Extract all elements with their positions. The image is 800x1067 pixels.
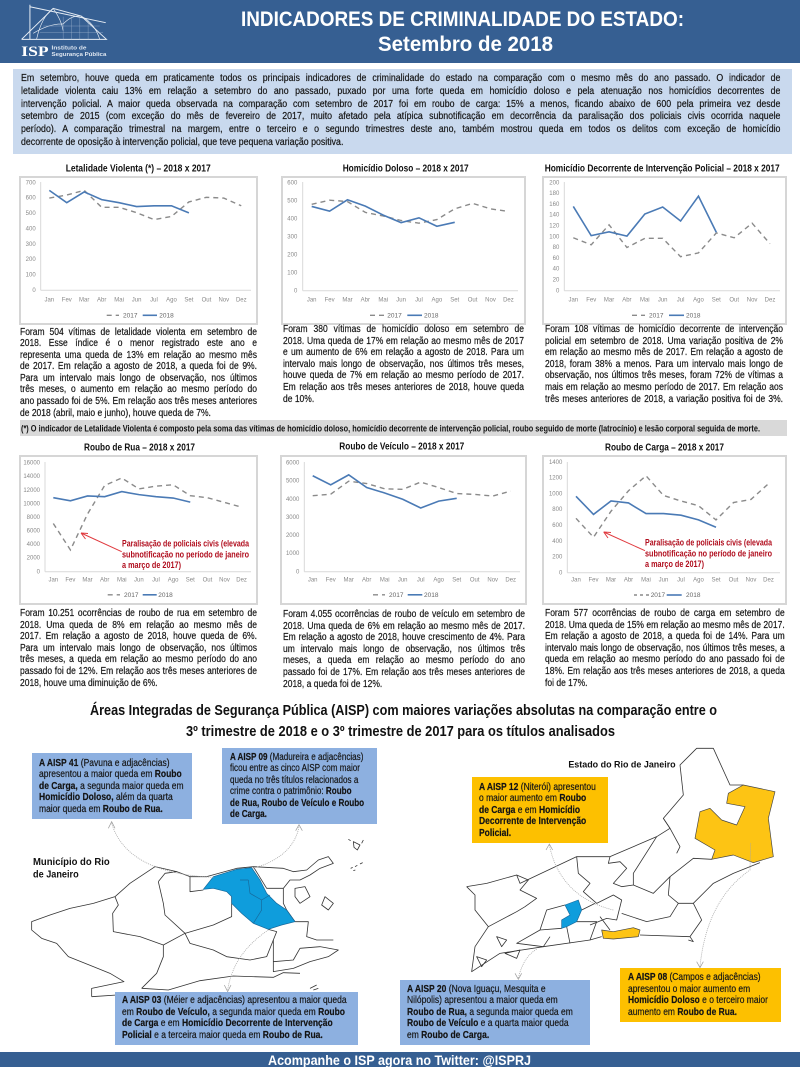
chart: Homicídio Decorrente de Intervenção Policial: 120	[549, 223, 560, 229]
chart: Homicídio Doloso: 400	[287, 216, 298, 222]
text: Letalidade Violenta caption: de 2018 (abril, maio e junho), houve queda de 7%.	[20, 408, 211, 419]
chart: Roubo de Veículo: Fev	[326, 578, 336, 584]
chart: Roubo de Rua: 6000	[27, 528, 41, 534]
callout: AISP 41: maior queda em Roubo de Rua.	[39, 804, 163, 815]
chart: Roubo de Rua: Abr	[100, 578, 109, 584]
chart: Roubo de Rua: Set	[186, 578, 195, 584]
section heading: AISP: 3º trimestre de 2018 e o 3º trimestre de 2017 para os títulos analisados	[186, 724, 615, 740]
chart: Homicídio Decorrente de Intervenção Policial: 180	[549, 191, 560, 197]
chart: Letalidade Violenta: Mar	[79, 298, 89, 304]
chart: Roubo de Veículo: Jul	[417, 578, 425, 584]
chart: Roubo de Carga: 1200	[549, 476, 563, 482]
chart: Letalidade Violenta: 200	[26, 257, 36, 263]
chart: Roubo de Rua: Mai	[117, 578, 127, 584]
callout: AISP 20: Roubo de Rua, a segunda maior queda em	[407, 1007, 573, 1018]
label: Município do Rio de Janeiro: de Janeiro	[33, 870, 79, 881]
chart: Homicídio Doloso: 2018	[424, 312, 439, 320]
chart: Homicídio Decorrente de Intervenção Policial: 200	[549, 180, 560, 186]
label: Estado do Rio de Janeiro: Estado do Rio de Janeiro	[568, 759, 676, 769]
chart: Roubo de Veículo: Dez	[505, 578, 516, 584]
callout: AISP 09: de Carga.	[230, 809, 267, 820]
callout: AISP 08	[620, 968, 781, 1022]
callout: AISP 20: A AISP 20 (Nova Iguaçu, Mesquita e	[407, 984, 546, 994]
chart: Letalidade Violenta: Jul	[150, 298, 158, 304]
chart: Roubo de Carga: 0	[559, 570, 563, 576]
text: Intervenção Policial caption: observação, nos últimos três meses, foram 72% de vítimas a	[545, 370, 783, 381]
chart: Roubo de Rua: Mar	[82, 578, 93, 584]
callout: AISP 09: A AISP 09 (Madureira e adjacências)	[230, 752, 363, 762]
chart: Roubo de Carga: Nov	[746, 578, 756, 584]
chart: Roubo de Veículo: Abr	[362, 578, 371, 584]
panel: intro summary: período). A comparação trimestral na margem, entre o terceiro e o segundo trimestres deste ano, também mostrou queda em todos os delitos com exceção de homicídio	[21, 124, 780, 135]
text: Roubo de Veículo caption: 2018. Uma queda de 6% em relação ao mesmo mês de 2017.	[283, 621, 525, 632]
chart: Homicídio Decorrente de Intervenção Policial: 0	[556, 288, 560, 294]
chart titles: first row	[66, 163, 780, 175]
chart: Roubo de Carga: Out	[729, 578, 739, 584]
chart: Letalidade Violenta: Jun	[132, 298, 141, 304]
text: Roubo de Veículo caption: um intervalo mais longo de observação, nos últimos três	[283, 644, 525, 655]
chart: Roubo de Veículo: 2017	[389, 592, 404, 599]
chart: Roubo de Rua: Jan	[48, 578, 58, 584]
chart: Roubo de Veículo: Mar	[344, 578, 354, 584]
panel: intro summary: intervenção policial. A maior queda observada na comparação com setembro de 2017 foi em roubo de carga: 15% a menos, ficando abaixo de 600 pela primeira vez desde	[21, 99, 780, 110]
text: Roubo de Carga caption: 18%. Em relação aos três meses anteriores de 2018, a queda	[545, 666, 785, 677]
chart: Homicídio Doloso: Jul	[415, 298, 423, 304]
callout: paralisação	[81, 533, 250, 570]
callout: AISP 08: aumento em Roubo de Rua.	[628, 1007, 737, 1018]
chart: Homicídio Doloso: Jan	[307, 298, 317, 304]
chart: Letalidade Violenta: 600	[26, 196, 36, 202]
text: Roubo de Veículo caption: Foram 4.055 ocorrências de roubo de veículo em setembro de	[283, 609, 525, 620]
text: Homicídio Doloso caption: Foram 380 vítimas de homicídio doloso em setembro de	[283, 324, 524, 335]
chart: Roubo de Veículo	[281, 456, 526, 604]
chart: Roubo de Rua: 2017	[124, 592, 139, 599]
chart: Homicídio Decorrente de Intervenção Policial: 80	[553, 245, 560, 251]
text: Roubo de Carga caption: 2018. Uma queda de 15% em relação ao mesmo mês de 2017.	[545, 620, 785, 631]
chart: Homicídio Doloso: 500	[287, 198, 298, 204]
callout: AISP 08: apresentou o maior aumento em	[628, 984, 750, 995]
chart: Roubo de Rua: Jul	[152, 578, 160, 584]
highlighted AISP 20	[562, 900, 582, 928]
chart: Roubo de Carga: 2018	[686, 592, 701, 599]
chart: Roubo de Veículo: Ago	[433, 578, 445, 584]
chart: Letalidade Violenta: 2018	[159, 312, 174, 320]
chart: Roubo de Veículo: 4000	[286, 497, 300, 503]
chart: Homicídio Doloso: Out	[468, 298, 478, 304]
chart: Roubo de Rua: 10000	[23, 501, 41, 507]
text: Roubo de Carga caption: intervalo mais longo de observação, nos últimos três meses, a	[545, 643, 785, 654]
chart: Roubo de Rua: Nov	[219, 578, 230, 584]
text: Letalidade Violenta caption: 2018. Esse índice é o menor registrado este ano e	[20, 338, 257, 349]
chart titles: second row: Roubo de Rua – 2018 x 2017	[84, 442, 195, 454]
chart: Roubo de Rua: 12000	[23, 488, 41, 494]
chart: Letalidade Violenta: Out	[202, 298, 212, 304]
callout: AISP 41: A AISP 41 (Pavuna e adjacências)	[39, 758, 170, 768]
chart: Roubo de Rua: Fev	[65, 578, 75, 584]
callout: AISP 03: de Carga e em Homicídio Decorrente de Intervenção	[122, 1018, 333, 1029]
text: Roubo de Rua caption: três meses, a queda em relação ao mesmo período do ano	[20, 654, 257, 665]
callout: paralisação: a março de 2017)	[645, 559, 704, 569]
chart: Roubo de Carga: 400	[552, 539, 563, 545]
chart: Roubo de Rua: Ago	[168, 578, 179, 584]
chart: Letalidade Violenta: 100	[26, 272, 36, 278]
chart: Letalidade Violenta	[20, 177, 257, 324]
chart: Roubo de Carga: Abr	[624, 578, 633, 584]
callout: AISP 03: A AISP 03 (Méier e adjacências) apresentou a maior queda	[122, 995, 347, 1006]
chart: Homicídio Decorrente de Intervenção Policial: Nov	[747, 298, 757, 304]
chart: Letalidade Violenta: Dez	[236, 298, 247, 304]
chart: Homicídio Decorrente de Intervenção Policial: 20	[553, 277, 560, 283]
chart: Roubo de Carga: 600	[552, 523, 563, 529]
label: Município do Rio de Janeiro	[33, 857, 110, 881]
chart: Homicídio Doloso: Dez	[503, 298, 514, 304]
chart: Homicídio Decorrente de Intervenção Policial: Fev	[586, 298, 596, 304]
chart: Letalidade Violenta: 2017	[123, 312, 138, 320]
chart: Homicídio Doloso: 300	[287, 234, 298, 240]
map: Município do Rio de Janeiro	[31, 821, 364, 998]
chart: Homicídio Decorrente de Intervenção Policial: 160	[549, 202, 560, 208]
text: Roubo de Veículo caption: meses, a queda em relação ao mesmo período do ano	[283, 655, 525, 666]
title: Setembro de 2018	[378, 33, 553, 56]
callout: paralisação	[604, 532, 773, 569]
text: Letalidade Violenta caption	[20, 326, 257, 419]
map outline and regional boundaries	[467, 748, 760, 972]
map: Estado do Rio de Janeiro	[466, 748, 776, 980]
chart: Roubo de Carga: Dez	[763, 578, 774, 584]
text: Homicídio Doloso caption: de 10%.	[283, 394, 314, 405]
text: Roubo de Rua caption: 2017. Em relação a agosto de 2018, houve queda de 6%.	[20, 631, 257, 642]
callout: AISP 03: Policial e a terceira maior queda em Roubo de Rua.	[122, 1030, 323, 1041]
callout: AISP 41: de Carga, a segunda maior queda em	[39, 781, 184, 792]
text: Intervenção Policial caption: 2018, foram 38% a menos. Para um intervalo mais longo de	[545, 359, 783, 370]
chart: Roubo de Carga: Jan	[571, 578, 581, 584]
chart: Letalidade Violenta: 500	[26, 211, 36, 217]
text: Roubo de Carga caption	[545, 608, 785, 689]
chart: Homicídio Decorrente de Intervenção Policial	[543, 177, 786, 324]
chart: Homicídio Doloso: Abr	[361, 298, 370, 304]
chart: Roubo de Veículo: Mai	[380, 578, 390, 584]
section heading: AISP	[90, 702, 717, 740]
callout: AISP 41: Homicídio Doloso, além da quarta	[39, 792, 173, 803]
chart: Roubo de Carga: Set	[711, 578, 721, 584]
panel: intro summary: decorrente de oposição à intervenção policial, que teve pequena variação positiva.	[21, 137, 343, 148]
header banner	[0, 0, 800, 63]
text: Roubo de Rua caption: 2018. Uma queda de 8% em relação ao mesmo mês de	[20, 620, 257, 631]
chart: Homicídio Decorrente de Intervenção Policial: 100	[549, 234, 560, 240]
chart: Roubo de Rua	[20, 456, 257, 604]
chart: Letalidade Violenta: Set	[184, 298, 194, 304]
icon: ISP logo	[21, 4, 108, 60]
text: Homicídio Doloso caption: intervalo mais longo de observação, nos últimos três meses,	[283, 359, 524, 370]
title	[241, 8, 684, 56]
callout: AISP 12: de Carga e em Homicídio	[479, 805, 580, 816]
chart: Roubo de Veículo: 2000	[286, 533, 300, 539]
callout: AISP 41	[32, 753, 192, 819]
chart: Roubo de Veículo: 3000	[286, 515, 300, 521]
text: Homicídio Doloso caption	[283, 324, 524, 405]
callout: AISP 09: queda no três títulos relacionados a	[230, 775, 358, 786]
text: Letalidade Violenta caption: Foram 504 vítimas de letalidade violenta em setembro de	[20, 326, 257, 338]
chart: Letalidade Violenta: Fev	[62, 298, 72, 304]
chart: Homicídio Decorrente de Intervenção Policial: Abr	[622, 298, 632, 304]
chart: Roubo de Rua: 8000	[27, 515, 41, 521]
chart titles: second row: Roubo de Veículo – 2018 x 2017	[339, 441, 464, 453]
chart: Homicídio Doloso: Jun	[396, 298, 406, 304]
text: Roubo de Rua caption: passado foi de 12%. Em relação aos três meses anteriores de	[20, 666, 257, 677]
text: Letalidade Violenta caption: de 2017. Em relação a agosto de 2018, a queda foi de 9%.	[20, 361, 257, 372]
chart: Homicídio Doloso: Mai	[378, 298, 388, 304]
chart: Letalidade Violenta: 0	[32, 288, 36, 294]
text: Homicídio Doloso caption: houve queda de 7% em relação ao mesmo período de 2017.	[283, 370, 524, 381]
chart: Letalidade Violenta: Abr	[97, 298, 106, 304]
chart: Roubo de Rua: 2018	[158, 592, 173, 599]
chart: Homicídio Doloso: 100	[287, 270, 298, 276]
text: Letalidade Violenta caption: representa uma queda de 13% em relação ao mesmo mês	[20, 350, 257, 361]
chart titles: first row: Letalidade Violenta (*) – 2018 x 2017	[66, 163, 211, 175]
callout: AISP 09: de Rua, Roubo de Veículo e Roubo	[230, 798, 364, 809]
label: Município do Rio de Janeiro: Município do Rio	[33, 857, 110, 868]
highlighted AISP 41, 09 and 03	[203, 868, 295, 929]
text: Roubo de Rua caption	[20, 608, 257, 689]
chart: Homicídio Doloso: 0	[294, 288, 298, 294]
chart: Homicídio Doloso: Set	[450, 298, 460, 304]
text: Roubo de Rua caption: Para um intervalo mais longo de observação, nos últimos	[20, 643, 257, 654]
chart: Roubo de Carga: Mar	[606, 578, 616, 584]
chart: Roubo de Veículo: 0	[296, 569, 300, 575]
arrows to callouts	[112, 823, 299, 990]
text: Roubo de Rua caption: Foram 10.251 ocorrências de roubo de rua em setembro de	[20, 608, 257, 619]
chart: Roubo de Veículo: 1000	[286, 551, 300, 557]
panel: intro summary: setembro de 2015 (com exceção do mês de fevereiro de 2017, muito afetado pela atípica subnotificação em decorrência da paralisação dos policiais civis ocorrida naquele	[21, 111, 780, 122]
chart: Roubo de Carga: Ago	[693, 578, 704, 584]
chart: Roubo de Rua: 14000	[23, 474, 41, 480]
chart: Roubo de Veículo: Set	[452, 578, 462, 584]
callout: AISP 08: A AISP 08 (Campos e adjacências)	[628, 972, 760, 983]
callout: AISP 03	[115, 992, 358, 1045]
footnote bar	[20, 420, 787, 436]
chart: Homicídio Decorrente de Intervenção Policial: Jun	[658, 298, 668, 304]
chart: Homicídio Doloso: Mar	[342, 298, 353, 304]
chart: Letalidade Violenta: 400	[26, 226, 36, 232]
chart: Roubo de Veículo: Out	[470, 578, 480, 584]
callout: AISP 20	[400, 980, 590, 1045]
chart: Letalidade Violenta: Ago	[166, 298, 177, 304]
chart: Homicídio Decorrente de Intervenção Policial: Set	[712, 298, 721, 304]
text: Homicídio Doloso caption: e um aumento de 6% em relação a agosto de 2018. Para um	[283, 347, 524, 358]
text: Letalidade Violenta caption: ano passado foi de 5%. Em relação aos três meses anteriores	[20, 396, 257, 407]
callout: paralisação: a março de 2017)	[122, 560, 181, 570]
chart: Roubo de Rua: 0	[37, 569, 41, 575]
chart: Homicídio Decorrente de Intervenção Policial: Mar	[604, 298, 614, 304]
chart: Roubo de Rua: 2000	[27, 556, 41, 562]
panel: intro summary: letalidade violenta caiu 13% em relação a setembro do ano passado, puxado por uma forte queda em homicídio doloso e pela atenuação nos homicídios decorrentes de	[21, 86, 780, 97]
chart: Roubo de Carga	[543, 456, 786, 604]
chart: Roubo de Carga: 1400	[549, 460, 563, 466]
callout: AISP 12: A AISP 12 (Niterói) apresentou	[479, 782, 596, 792]
chart: Letalidade Violenta: Nov	[218, 298, 229, 304]
text: Roubo de Carga caption: Foram 577 ocorrências de roubo de carga em setembro de	[545, 608, 785, 619]
chart: Homicídio Doloso: 200	[287, 252, 298, 258]
callout: AISP 12	[472, 777, 608, 843]
text: Roubo de Carga caption: Em relação a agosto de 2018, a queda foi de 14%. Para um	[545, 631, 785, 642]
text: Homicídio Doloso caption: Em relação aos três meses anteriores de 2018, houve queda	[283, 382, 524, 393]
callout: AISP 41: apresentou a maior queda em Roubo	[39, 769, 182, 780]
chart titles: second row	[84, 441, 724, 454]
chart: Roubo de Rua: Out	[203, 578, 213, 584]
callout: AISP 20: em Roubo de Carga.	[407, 1030, 489, 1041]
chart: Homicídio Decorrente de Intervenção Policial: Jul	[677, 298, 684, 304]
text: Roubo de Carga caption: queda em relação ao mesmo período do ano passado foi de	[545, 654, 785, 665]
chart: Homicídio Decorrente de Intervenção Policial: 2018	[686, 312, 701, 320]
chart: Roubo de Carga: 1000	[549, 491, 563, 497]
chart: Homicídio Doloso	[282, 177, 525, 324]
panel: intro summary: Em setembro, houve queda em praticamente todos os principais indicadores de criminalidade do estado na comparação com o mesmo mês do ano passado. O indicador de	[21, 73, 780, 84]
chart: Roubo de Carga: Jun	[659, 578, 668, 584]
callout: AISP 09: crime contra o patrimônio: Roubo	[230, 786, 352, 797]
chart: Roubo de Carga: 200	[552, 554, 563, 560]
footer banner	[0, 1052, 800, 1067]
callout: AISP 09: ficou entre as cinco AISP com maior	[230, 763, 360, 774]
callout: AISP 12: Decorrente de Intervenção	[479, 816, 586, 827]
arrows to callouts	[518, 843, 751, 978]
chart: Letalidade Violenta: Jan	[44, 298, 54, 304]
text: Intervenção Policial caption: três meses anteriores de 2018, a variação positiva foi de 3%.	[545, 394, 783, 405]
chart: Homicídio Decorrente de Intervenção Policial: 40	[553, 267, 560, 273]
callout: AISP 09	[222, 748, 377, 824]
callout: AISP 20: Roubo de Veículo e a quarta maior queda	[407, 1018, 569, 1029]
chart: Letalidade Violenta: Mai	[114, 298, 124, 304]
chart: Homicídio Decorrente de Intervenção Policial: Dez	[765, 298, 775, 304]
chart: Roubo de Veículo: 5000	[286, 479, 300, 485]
chart: Roubo de Veículo: Nov	[487, 578, 498, 584]
chart: Homicídio Decorrente de Intervenção Policial: Out	[729, 298, 739, 304]
chart: Roubo de Veículo: 2018	[424, 592, 439, 599]
text: Roubo de Veículo caption	[283, 609, 526, 690]
text: Letalidade Violenta caption: Para um intervalo mais longo de observação, nos últimos	[20, 373, 257, 384]
text: Roubo de Veículo caption: 2018, a queda foi de 12%.	[283, 679, 382, 690]
chart titles: second row: Roubo de Carga – 2018 x 2017	[605, 442, 724, 454]
chart: Roubo de Veículo: Jan	[308, 578, 318, 584]
chart: Homicídio Decorrente de Intervenção Policial: Jan	[568, 298, 578, 304]
chart: Homicídio Decorrente de Intervenção Policial: 2017	[649, 312, 664, 320]
text: Intervenção Policial caption	[545, 324, 784, 405]
chart: Roubo de Carga: Mai	[641, 578, 651, 584]
text: Roubo de Rua caption: 2018, houve uma diminuição de 6%.	[20, 678, 158, 689]
chart: Roubo de Rua: 4000	[27, 542, 41, 548]
chart: Letalidade Violenta: 700	[26, 180, 36, 186]
chart: Homicídio Decorrente de Intervenção Policial: 60	[553, 256, 560, 262]
chart: Homicídio Doloso: 2017	[387, 312, 402, 320]
chart titles: first row: Homicídio Doloso – 2018 x 2017	[343, 163, 469, 175]
text: Intervenção Policial caption: mais em relação ao mesmo período de 2017. Em relação aos	[545, 382, 783, 393]
chart: Homicídio Decorrente de Intervenção Policial: Mai	[640, 298, 650, 304]
callout: AISP 12: o maior aumento em Roubo	[479, 793, 586, 804]
map outline and AISP boundaries	[32, 839, 363, 997]
chart: Roubo de Carga: Fev	[588, 578, 599, 584]
callout: AISP 12: Policial.	[479, 828, 511, 839]
callout: AISP 08: Homicídio Doloso e o terceiro maior	[628, 995, 768, 1006]
panel: intro summary	[13, 69, 792, 154]
chart: Roubo de Carga: Jul	[677, 578, 685, 584]
chart: Roubo de Rua: Jun	[134, 578, 144, 584]
text: Intervenção Policial caption: Foram 108 vítimas de homicídio decorrente de intervenção	[545, 324, 783, 335]
chart: Roubo de Rua: Dez	[236, 578, 247, 584]
chart: Roubo de Carga: 800	[552, 507, 563, 513]
chart: Homicídio Doloso: Nov	[485, 298, 496, 304]
text: Roubo de Carga caption: foi de 17%.	[545, 678, 588, 689]
chart: Roubo de Veículo: 6000	[286, 461, 300, 467]
text: Homicídio Doloso caption: 2018. Uma queda de 17% em relação ao mesmo mês de 2017	[283, 336, 524, 347]
text: Intervenção Policial caption: em relação ao mesmo mês de 2017. Em relação a agosto de	[545, 347, 783, 358]
chart: Homicídio Decorrente de Intervenção Policial: Ago	[693, 298, 704, 304]
chart: Roubo de Veículo: Jun	[398, 578, 408, 584]
callout: AISP 20: Nilópolis) apresentou a maior queda em	[407, 995, 558, 1006]
text: Letalidade Violenta caption: três meses, o aumento em relação ao mesmo período do	[20, 384, 257, 395]
chart: Homicídio Decorrente de Intervenção Policial: 140	[549, 213, 560, 219]
chart: Letalidade Violenta: 300	[26, 242, 36, 248]
icon: ISP logo: ISP	[21, 44, 49, 60]
icon: ISP logo: Segurança Pública	[52, 52, 107, 58]
highlighted AISP 08 and 12	[602, 785, 775, 939]
text: Intervenção Policial caption: policial em setembro de 2018. Uma variação positiva de 2%	[545, 336, 783, 347]
chart: Homicídio Doloso: Ago	[432, 298, 443, 304]
chart: Homicídio Doloso: 600	[287, 180, 298, 186]
chart: Homicídio Doloso: Fev	[325, 298, 335, 304]
icon: ISP logo: Instituto de	[52, 46, 86, 52]
callout: AISP 03: em Roubo de Veículo, a segunda maior queda em Roubo	[122, 1007, 345, 1018]
text: Roubo de Veículo caption: Em relação a agosto de 2018, houve crescimento de 4%. Para	[283, 632, 525, 643]
text: Roubo de Veículo caption: passado foi de 17%. Em relação aos três meses anteriores de	[283, 667, 525, 678]
chart: Roubo de Rua: 16000	[23, 461, 41, 467]
chart: Roubo de Carga: 2017	[651, 592, 666, 599]
